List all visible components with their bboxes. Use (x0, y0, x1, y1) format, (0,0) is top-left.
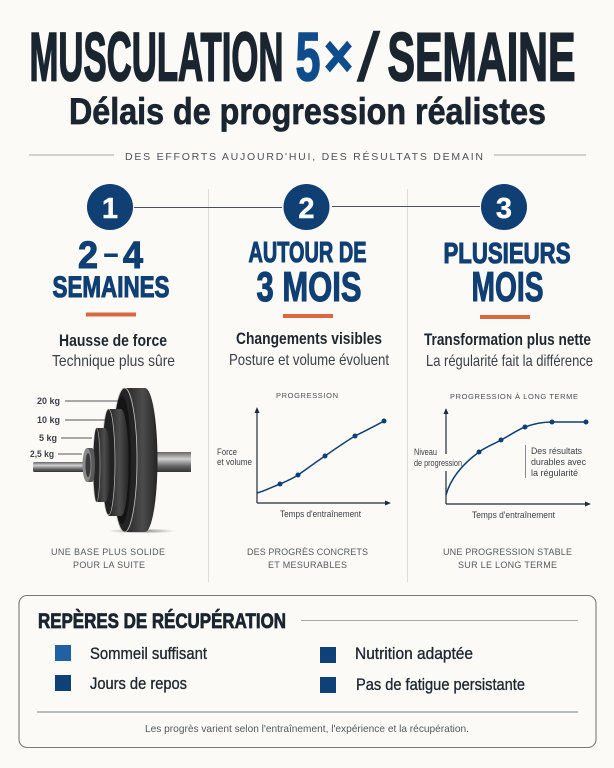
text: force: Hausse de force (59, 332, 167, 350)
weight labels (30, 396, 118, 459)
subtitle: Délais de progression réalistes (69, 91, 546, 132)
title: / (357, 19, 381, 96)
chart: long-term progression: PROGRESSION À LONG TERME (450, 392, 578, 401)
chart: long-term progression: Niveau (414, 447, 437, 457)
text: changes (229, 330, 389, 369)
weight labels: 10 kg (37, 415, 60, 425)
step number 2: 2 (298, 193, 315, 225)
caption 3: SUR LE LONG TERME (458, 560, 557, 570)
weight labels: 2,5 kg (30, 449, 54, 459)
accent bar 1 (86, 312, 136, 316)
duration: 2-4 semaines: – (104, 241, 118, 268)
illustration: barbell with plates (33, 388, 191, 534)
step number 2 (284, 184, 330, 230)
item: sommeil: Sommeil suffisant (90, 644, 207, 663)
caption 1 (51, 547, 165, 570)
chart: long-term progression: Temps d'entraînement (472, 510, 555, 520)
item: sommeil (55, 644, 207, 663)
text: transformation (424, 331, 593, 370)
chart: progression: et volume (217, 457, 252, 467)
chart: progression: Temps d'entraînement (280, 509, 361, 519)
step number 3 (481, 184, 527, 230)
timeline connector (134, 206, 480, 208)
item: nutrition: Nutrition adaptée (355, 644, 473, 663)
step number 1: 1 (102, 193, 118, 225)
duration: autour de 3 mois: 3 MOIS (256, 263, 362, 310)
item: fatigue: Pas de fatigue persistante (356, 675, 525, 694)
duration: autour de 3 mois: AUTOUR DE (248, 237, 366, 269)
footnote: Les progrès varient selon l'entraînement, l'expérience et la récupération. (145, 723, 469, 735)
chart: progression: PROGRESSION (276, 391, 338, 400)
text: changes: Posture et volume évoluent (229, 352, 389, 369)
caption 3 (443, 547, 572, 570)
weight labels: 5 kg (39, 433, 57, 443)
chart: long-term progression: durables avec (531, 457, 586, 467)
item: repos: Jours de repos (90, 674, 187, 693)
recovery heading: REPÈRES DE RÉCUPÉRATION (38, 610, 286, 633)
panel: step 2 (217, 184, 391, 570)
duration: 2-4 semaines: 4 (123, 235, 143, 277)
chart: progression: Force (217, 447, 237, 457)
tagline: DES EFFORTS AUJOURD'HUI, DES RÉSULTATS DEMAIN (125, 150, 483, 163)
panel: step 1 (30, 184, 191, 570)
duration: 2-4 semaines (52, 235, 170, 304)
chart: long-term progression: Des résultats (531, 446, 582, 456)
chart: long-term progression: la régularité (531, 468, 578, 478)
chart: progression (217, 391, 391, 519)
text: changes: Changements visibles (236, 330, 382, 348)
panel: step 3 (414, 184, 593, 570)
caption 1: POUR LA SUITE (73, 560, 145, 570)
duration: 2-4 semaines: SEMAINES (52, 271, 170, 304)
caption 2: ET MESURABLES (268, 560, 347, 570)
duration: autour de 3 mois (248, 237, 366, 310)
text: force: Technique plus sûre (52, 353, 175, 370)
panel: recovery (19, 596, 596, 748)
accent bar 3 (480, 315, 530, 319)
chart: long-term progression (414, 392, 591, 520)
step number 1 (87, 184, 133, 230)
duration: plusieurs mois (444, 238, 570, 310)
caption 2: DES PROGRÈS CONCRETS (247, 547, 368, 557)
accent bar 2 (283, 314, 333, 318)
title: MUSCULATION (30, 18, 284, 96)
duration: plusieurs mois: PLUSIEURS (444, 238, 570, 270)
text: force (52, 332, 175, 370)
title: × (324, 24, 353, 89)
caption 2 (247, 547, 368, 570)
chart: long-term progression: de progression (414, 458, 462, 468)
item: repos (55, 674, 187, 693)
step number 3: 3 (496, 193, 512, 225)
caption 1: UNE BASE PLUS SOLIDE (51, 547, 165, 557)
caption 3: UNE PROGRESSION STABLE (443, 547, 572, 557)
duration: 2-4 semaines: 2 (78, 235, 98, 277)
title: 5 (296, 18, 320, 96)
duration: plusieurs mois: MOIS (472, 263, 544, 310)
weight labels: 20 kg (37, 396, 60, 406)
